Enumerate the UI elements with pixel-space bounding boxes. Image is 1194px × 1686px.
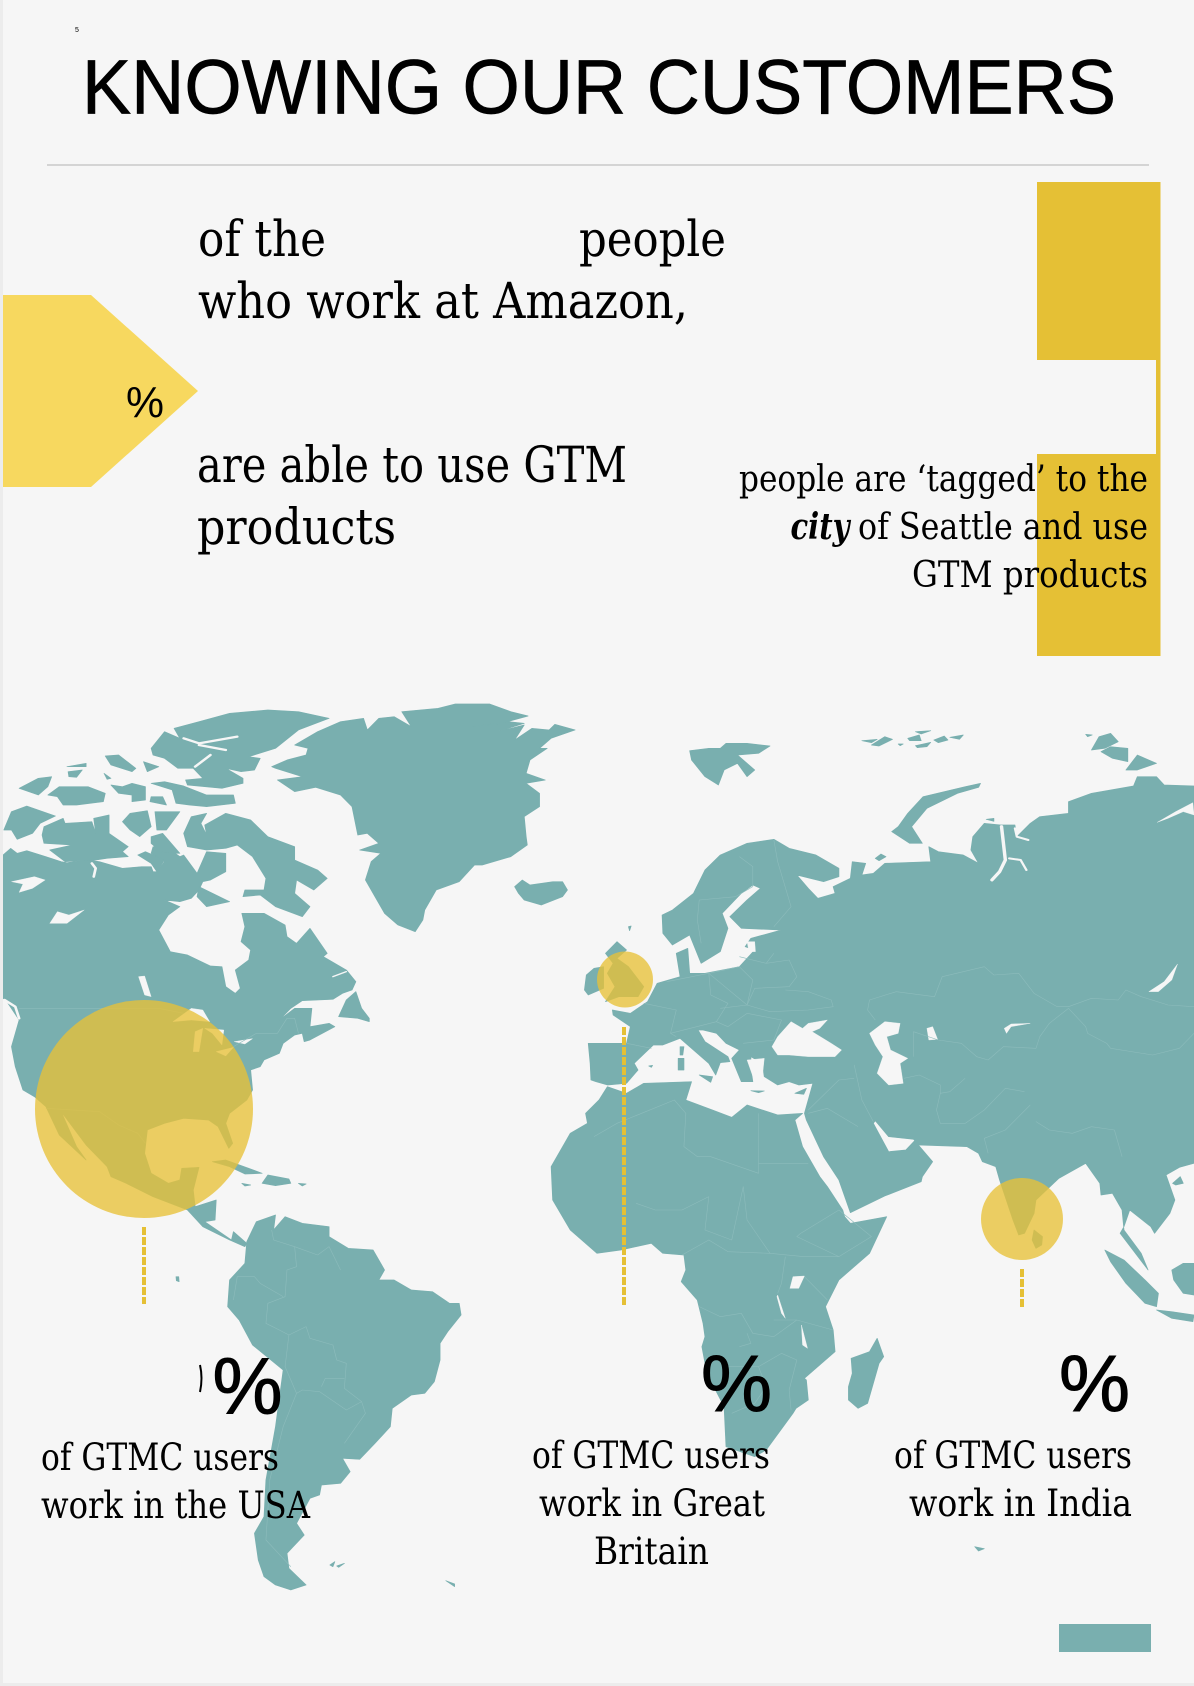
North America mainland <box>3 847 356 1247</box>
islands <box>584 731 1194 1551</box>
Arctic islands <box>4 710 329 917</box>
inland seas and lakes <box>747 803 1194 1085</box>
stat: USA <box>41 1342 311 1527</box>
Greenland <box>272 704 575 932</box>
text block: share of Amazon employees: of the <box>198 210 326 268</box>
panel: yellow blocks, top right <box>1037 182 1160 656</box>
map: Europe, Africa and Asia <box>551 731 1194 1551</box>
text block: share of Amazon employees: who work at Amazon, <box>198 272 688 330</box>
bubble: USA <box>35 1000 253 1218</box>
Africa <box>551 1082 887 1457</box>
stat: India <box>894 1339 1132 1525</box>
stat: USA: of GTMC users <box>41 1436 279 1479</box>
borders: Americas <box>19 1008 365 1567</box>
lakes <box>5 863 346 1056</box>
text block: share of Amazon employees: products <box>197 498 396 556</box>
stat: USA: work in the USA <box>41 1484 311 1527</box>
stat: Great Britain: work in Great <box>539 1482 765 1525</box>
stat: Great Britain: of GTMC users <box>532 1434 770 1477</box>
stat: Great Britain: % <box>701 1339 772 1428</box>
text block: share of Amazon employees: are able to use GTM <box>197 436 627 494</box>
teal footer block <box>1059 1624 1151 1652</box>
South America <box>228 1215 461 1590</box>
stat: India: of GTMC users <box>894 1434 1132 1477</box>
arrow badge with percent <box>3 295 198 487</box>
leader line: USA <box>142 1227 146 1304</box>
text block: tagged to Seattle: city <box>790 505 852 548</box>
Eurasia <box>588 777 1194 1270</box>
African lakes <box>777 1276 808 1348</box>
bubble: Great Britain <box>597 952 653 1008</box>
leader line: India <box>1020 1269 1024 1307</box>
stat: India: % <box>1059 1339 1130 1428</box>
stat: Great Britain: Britain <box>594 1530 709 1573</box>
stat: Great Britain <box>532 1339 772 1573</box>
stat: USA: % <box>212 1342 282 1430</box>
text block: tagged to Seattle: of Seattle and use <box>858 505 1148 548</box>
borders: Eurasia and Africa <box>594 840 1194 1413</box>
title: KNOWING OUR CUSTOMERS <box>82 44 1116 130</box>
world map <box>3 704 1194 1590</box>
text block: share of Amazon employees <box>197 210 726 556</box>
text block: share of Amazon employees: people <box>579 210 726 268</box>
map: Americas and Greenland <box>3 704 575 1590</box>
title rule <box>47 164 1149 166</box>
small footnote mark: 5 <box>75 27 79 34</box>
text block: tagged to Seattle: GTM products <box>912 553 1148 596</box>
arrow badge with percent: % <box>126 378 164 427</box>
stat: India: work in India <box>909 1482 1132 1525</box>
text block: tagged to Seattle <box>739 457 1148 596</box>
bubble: India <box>981 1178 1063 1260</box>
Atlantic and Caribbean islands <box>176 880 567 1587</box>
leader line: Great Britain <box>622 1027 626 1305</box>
